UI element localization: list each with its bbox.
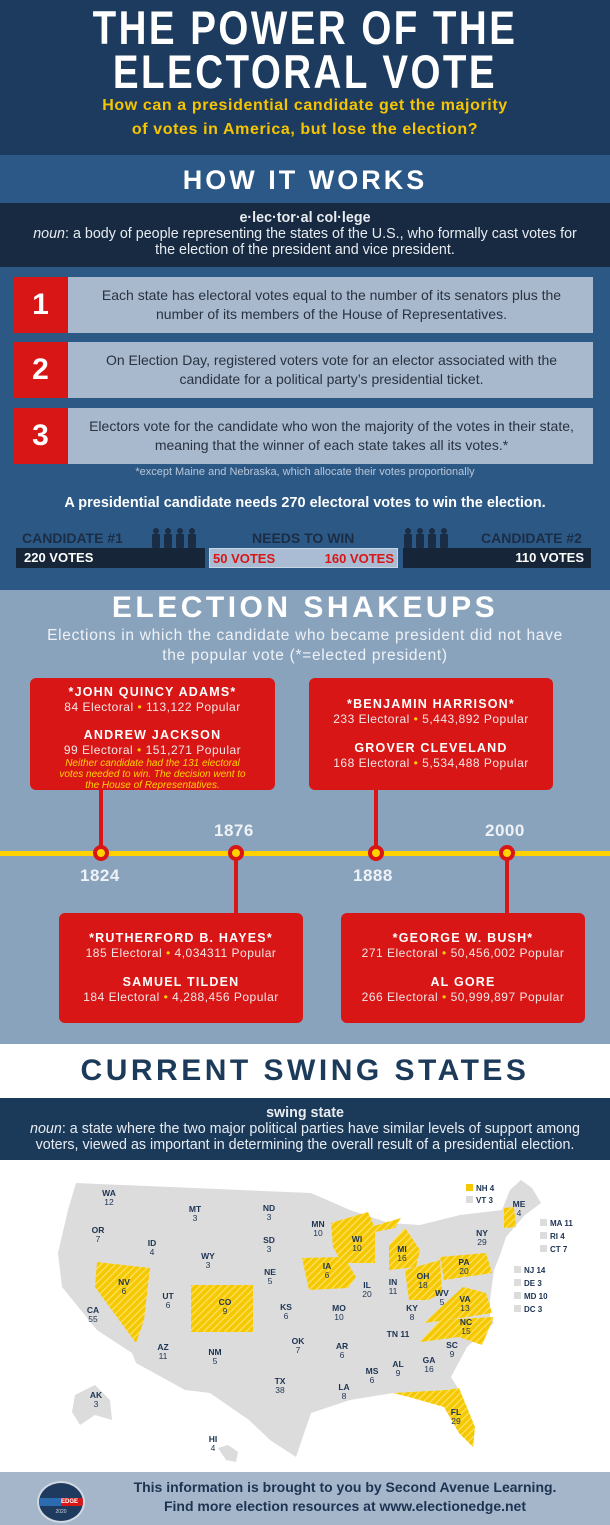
map: swing states: FL [451, 1407, 461, 1417]
map: swing states: 8 [342, 1391, 347, 1401]
box: 1824: Neither candidate had the 131 electoral [65, 758, 240, 769]
map: swing states: WY [201, 1251, 215, 1261]
map: swing states: WI [352, 1234, 362, 1244]
panel: election shakeups [0, 590, 610, 1044]
map: swing states: 55 [88, 1314, 98, 1324]
map: swing states: OR [92, 1225, 104, 1235]
map: swing states: MT [189, 1204, 202, 1214]
map: swing states: MS [366, 1366, 379, 1376]
box: 2000: *GEORGE W. BUSH* [393, 931, 533, 945]
icon: people right [404, 528, 448, 548]
subtitle: shakeups [47, 627, 563, 664]
map: swing states: 9 [396, 1368, 401, 1378]
map: swing states: UT [162, 1291, 174, 1301]
map: swing states: VA [459, 1294, 471, 1304]
footer text [134, 1479, 556, 1514]
map: swing states: 6 [284, 1311, 289, 1321]
map: swing states: MD 10 [524, 1292, 548, 1301]
box: 1876: 185 Electoral • 4,034311 Popular 184 Electoral • 4,288,456 Popular [83, 946, 279, 1004]
year 1888: 1888 [353, 866, 393, 885]
map: swing states: 3 [267, 1212, 272, 1222]
map: swing states: TN 11 [387, 1329, 410, 1339]
map: swing states: HI [209, 1434, 217, 1444]
step 1: Each state has electoral votes equal to the number of its senators plus the [102, 287, 561, 303]
map: swing states: 6 [122, 1286, 127, 1296]
box: 1888: GROVER CLEVELAND [354, 741, 508, 755]
map: swing states: MA 11 [550, 1219, 573, 1228]
bar: candidate 2 votes [403, 548, 591, 568]
bar: needs to win [209, 548, 398, 568]
map: swing states: 9 [450, 1349, 455, 1359]
definition: electoral college: the election of the president and vice president. [155, 242, 455, 258]
definition: swing state [0, 1098, 610, 1160]
timeline line [0, 851, 610, 856]
map: swing states: 6 [340, 1350, 345, 1360]
map: swing states: NE [264, 1267, 276, 1277]
map: swing states: 38 [275, 1385, 285, 1395]
label: needs to win: NEEDS TO WIN [252, 530, 354, 546]
map: swing states: 6 [166, 1300, 171, 1310]
definition: electoral college [0, 203, 610, 267]
map: swing states: NJ 14 [524, 1266, 546, 1275]
map: swing states: CA [87, 1305, 99, 1315]
heading: how it works [0, 155, 610, 203]
map: swing states: 6 [370, 1375, 375, 1385]
step 2 [13, 342, 593, 398]
step 1: number of its members of the House of Representatives. [156, 306, 507, 322]
box: 1824: 84 Electoral • 113,122 Popular 99 Electoral • 151,271 Popular [64, 700, 241, 757]
map: swing states: RI 4 [550, 1232, 565, 1241]
map: swing states: IL [363, 1280, 371, 1290]
year 2000: 2000 [485, 821, 525, 840]
map: swing states: ID [148, 1238, 156, 1248]
map: swing states: 3 [94, 1399, 99, 1409]
heading: current swing states: CURRENT SWING STATES [81, 1054, 529, 1087]
definition: electoral college: noun: a body of people representing the states of the U.S., who formally cast votes for [33, 226, 577, 242]
map: swing states: NM [208, 1347, 222, 1357]
heading: how it works: HOW IT WORKS [183, 165, 427, 195]
box: 2000: 271 Electoral • 50,456,002 Popular 266 Electoral • 50,999,897 Popular [362, 946, 564, 1004]
map: swing states: 18 [418, 1280, 428, 1290]
bar: candidate 1 votes [16, 548, 205, 568]
box: 1824 [30, 678, 275, 790]
step 3: meaning that the winner of each state takes all its votes.* [155, 437, 508, 453]
box: 1824: ANDREW JACKSON [84, 728, 221, 742]
step 2: 2 [32, 353, 49, 386]
map: swing states: 9 [223, 1306, 228, 1316]
box: 1888: 233 Electoral • 5,443,892 Popular 168 Electoral • 5,534,488 Popular [333, 712, 529, 770]
step 2: On Election Day, registered voters vote for an elector associated with the [106, 352, 557, 368]
header [0, 0, 610, 155]
map: swing states: 20 [362, 1289, 372, 1299]
year 1824: 1824 [80, 866, 120, 885]
map: swing states: 4 [211, 1443, 216, 1453]
map: swing states: SC [446, 1340, 458, 1350]
map: swing states: 10 [313, 1228, 323, 1238]
footnote: *except Maine and Nebraska, which allocate their votes proportionally [135, 466, 475, 478]
map: swing states: CT 7 [550, 1245, 568, 1254]
map: swing states: 10 [334, 1312, 344, 1322]
map: swing states: IA [323, 1261, 331, 1271]
map: swing states: ND [263, 1203, 275, 1213]
map: swing states: 16 [424, 1364, 434, 1374]
step 3 [13, 408, 593, 464]
box: 1888 [309, 678, 553, 790]
definition: swing state: voters, viewed as important in determining the overall result of a presidential election. [36, 1137, 574, 1153]
label: candidate 2: CANDIDATE #2 [481, 530, 582, 546]
map: swing states: 4 [150, 1247, 155, 1257]
title: ELECTORAL VOTE [113, 45, 497, 98]
map: swing states: PA [458, 1257, 470, 1267]
map: swing states: VT 3 [476, 1196, 493, 1205]
map: swing states: AK [90, 1390, 103, 1400]
map: swing states: 11 [159, 1351, 168, 1361]
box: 1876: SAMUEL TILDEN [123, 975, 239, 989]
bar: needs to win: 50 VOTES [213, 551, 275, 566]
definition: swing state: swing state [266, 1105, 344, 1121]
statement: 270 votes: A presidential candidate needs 270 electoral votes to win the election. [64, 495, 546, 511]
map: swing states: NC [460, 1317, 472, 1327]
map: swing states: MI [397, 1244, 407, 1254]
map: swing states: 29 [451, 1416, 461, 1426]
map: swing states: CO [219, 1297, 232, 1307]
map: swing states: 5 [268, 1276, 273, 1286]
map: swing states: 3 [267, 1244, 272, 1254]
map: swing states: 7 [96, 1234, 101, 1244]
label: candidate 1: CANDIDATE #1 [22, 530, 123, 546]
map: swing states: WV [435, 1288, 449, 1298]
map: swing states: 6 [325, 1270, 330, 1280]
map: swing states: AZ [157, 1342, 169, 1352]
map: swing states: WA [102, 1188, 116, 1198]
box: 1876: *RUTHERFORD B. HAYES* [89, 931, 273, 945]
icon: election edge logo: 2020 [55, 1509, 67, 1515]
definition: electoral college: e·lec·tor·al col·lege [239, 210, 371, 226]
year 1876: 1876 [214, 821, 254, 840]
map: swing states: NV [118, 1277, 130, 1287]
map: swing states: NY [476, 1228, 488, 1238]
bar: needs to win: 160 VOTES [325, 551, 394, 566]
map: swing states: 11 [389, 1286, 398, 1296]
map: swing states: 29 [477, 1237, 487, 1247]
map: swing states [58, 1180, 573, 1462]
footer text: Find more election resources at www.electionedge.net [164, 1498, 526, 1514]
step 3: Electors vote for the candidate who won the majority of the votes in their state, [89, 418, 574, 434]
map: swing states: SD [263, 1235, 275, 1245]
heading: election shakeups: ELECTION SHAKEUPS [112, 591, 498, 624]
map: swing states: KY [406, 1303, 418, 1313]
footer text: This information is brought to you by Second Avenue Learning. [134, 1479, 556, 1495]
bar: candidate 2 votes: 110 VOTES [515, 550, 584, 565]
title: THE POWER OF THE [93, 1, 517, 54]
heading: current swing states [0, 1044, 610, 1098]
map: swing states: LA [338, 1382, 350, 1392]
map: swing states: 10 [352, 1243, 362, 1253]
map: swing states: DE 3 [524, 1279, 542, 1288]
map: swing states: 5 [440, 1297, 445, 1307]
panel: steps [0, 267, 610, 590]
box: 1888: *BENJAMIN HARRISON* [347, 697, 515, 711]
box: 1824: the House of Representatives. [85, 780, 220, 791]
map: swing states: 8 [410, 1312, 415, 1322]
map: swing states: MO [332, 1303, 346, 1313]
map: swing states: 16 [397, 1253, 407, 1263]
definition: swing state: noun: a state where the two major political parties have similar levels of support among [30, 1121, 580, 1137]
step 2: candidate for a political party’s presidential ticket. [179, 371, 484, 387]
subtitle: shakeups: Elections in which the candidate who became president did not have [47, 627, 563, 644]
map: swing states: MN [311, 1219, 325, 1229]
bar: candidate 1 votes: 220 VOTES [24, 550, 93, 565]
subtitle [102, 97, 508, 138]
map: swing states: OK [292, 1336, 305, 1346]
subtitle: of votes in America, but lose the election? [132, 121, 478, 138]
box: 2000 [341, 913, 585, 1023]
map: swing states: 13 [460, 1303, 470, 1313]
map: swing states: NH 4 [476, 1184, 495, 1193]
map: swing states: DC 3 [524, 1305, 543, 1314]
map: swing states: 15 [461, 1326, 471, 1336]
map: swing states: 5 [213, 1356, 218, 1366]
map: swing states: ME [513, 1199, 526, 1209]
step 3: 3 [32, 419, 49, 452]
box: 1824: votes needed to win. The decision went to [59, 769, 246, 780]
map: swing states: AR [336, 1341, 348, 1351]
box: 1876 [59, 913, 303, 1023]
map: swing states: 3 [206, 1260, 211, 1270]
map: swing states: 3 [193, 1213, 198, 1223]
icon: people left [152, 528, 196, 548]
subtitle: shakeups: the popular vote (*=elected president) [162, 647, 448, 664]
map: swing states: 20 [459, 1266, 469, 1276]
map: swing states: GA [423, 1355, 435, 1365]
map: swing states: TX [275, 1376, 286, 1386]
step 1: 1 [32, 288, 49, 321]
map: swing states: 7 [296, 1345, 301, 1355]
box: 1824: *JOHN QUINCY ADAMS* [69, 685, 236, 699]
map: swing states: 4 [517, 1208, 522, 1218]
box: 2000: AL GORE [430, 975, 496, 989]
step 1 [13, 277, 593, 333]
footer [0, 1472, 610, 1525]
subtitle: How can a presidential candidate get the majority [102, 97, 508, 114]
connector lines [99, 790, 103, 850]
icon: election edge logo [37, 1481, 85, 1523]
map: swing states: AL [392, 1359, 404, 1369]
map: swing states: OH [417, 1271, 429, 1281]
icon: election edge logo: EDGE [61, 1499, 78, 1505]
map: swing states: IN [389, 1277, 397, 1287]
title [93, 1, 517, 98]
map: swing states: KS [280, 1302, 292, 1312]
timeline dots [93, 845, 109, 861]
map: swing states: 12 [104, 1197, 114, 1207]
